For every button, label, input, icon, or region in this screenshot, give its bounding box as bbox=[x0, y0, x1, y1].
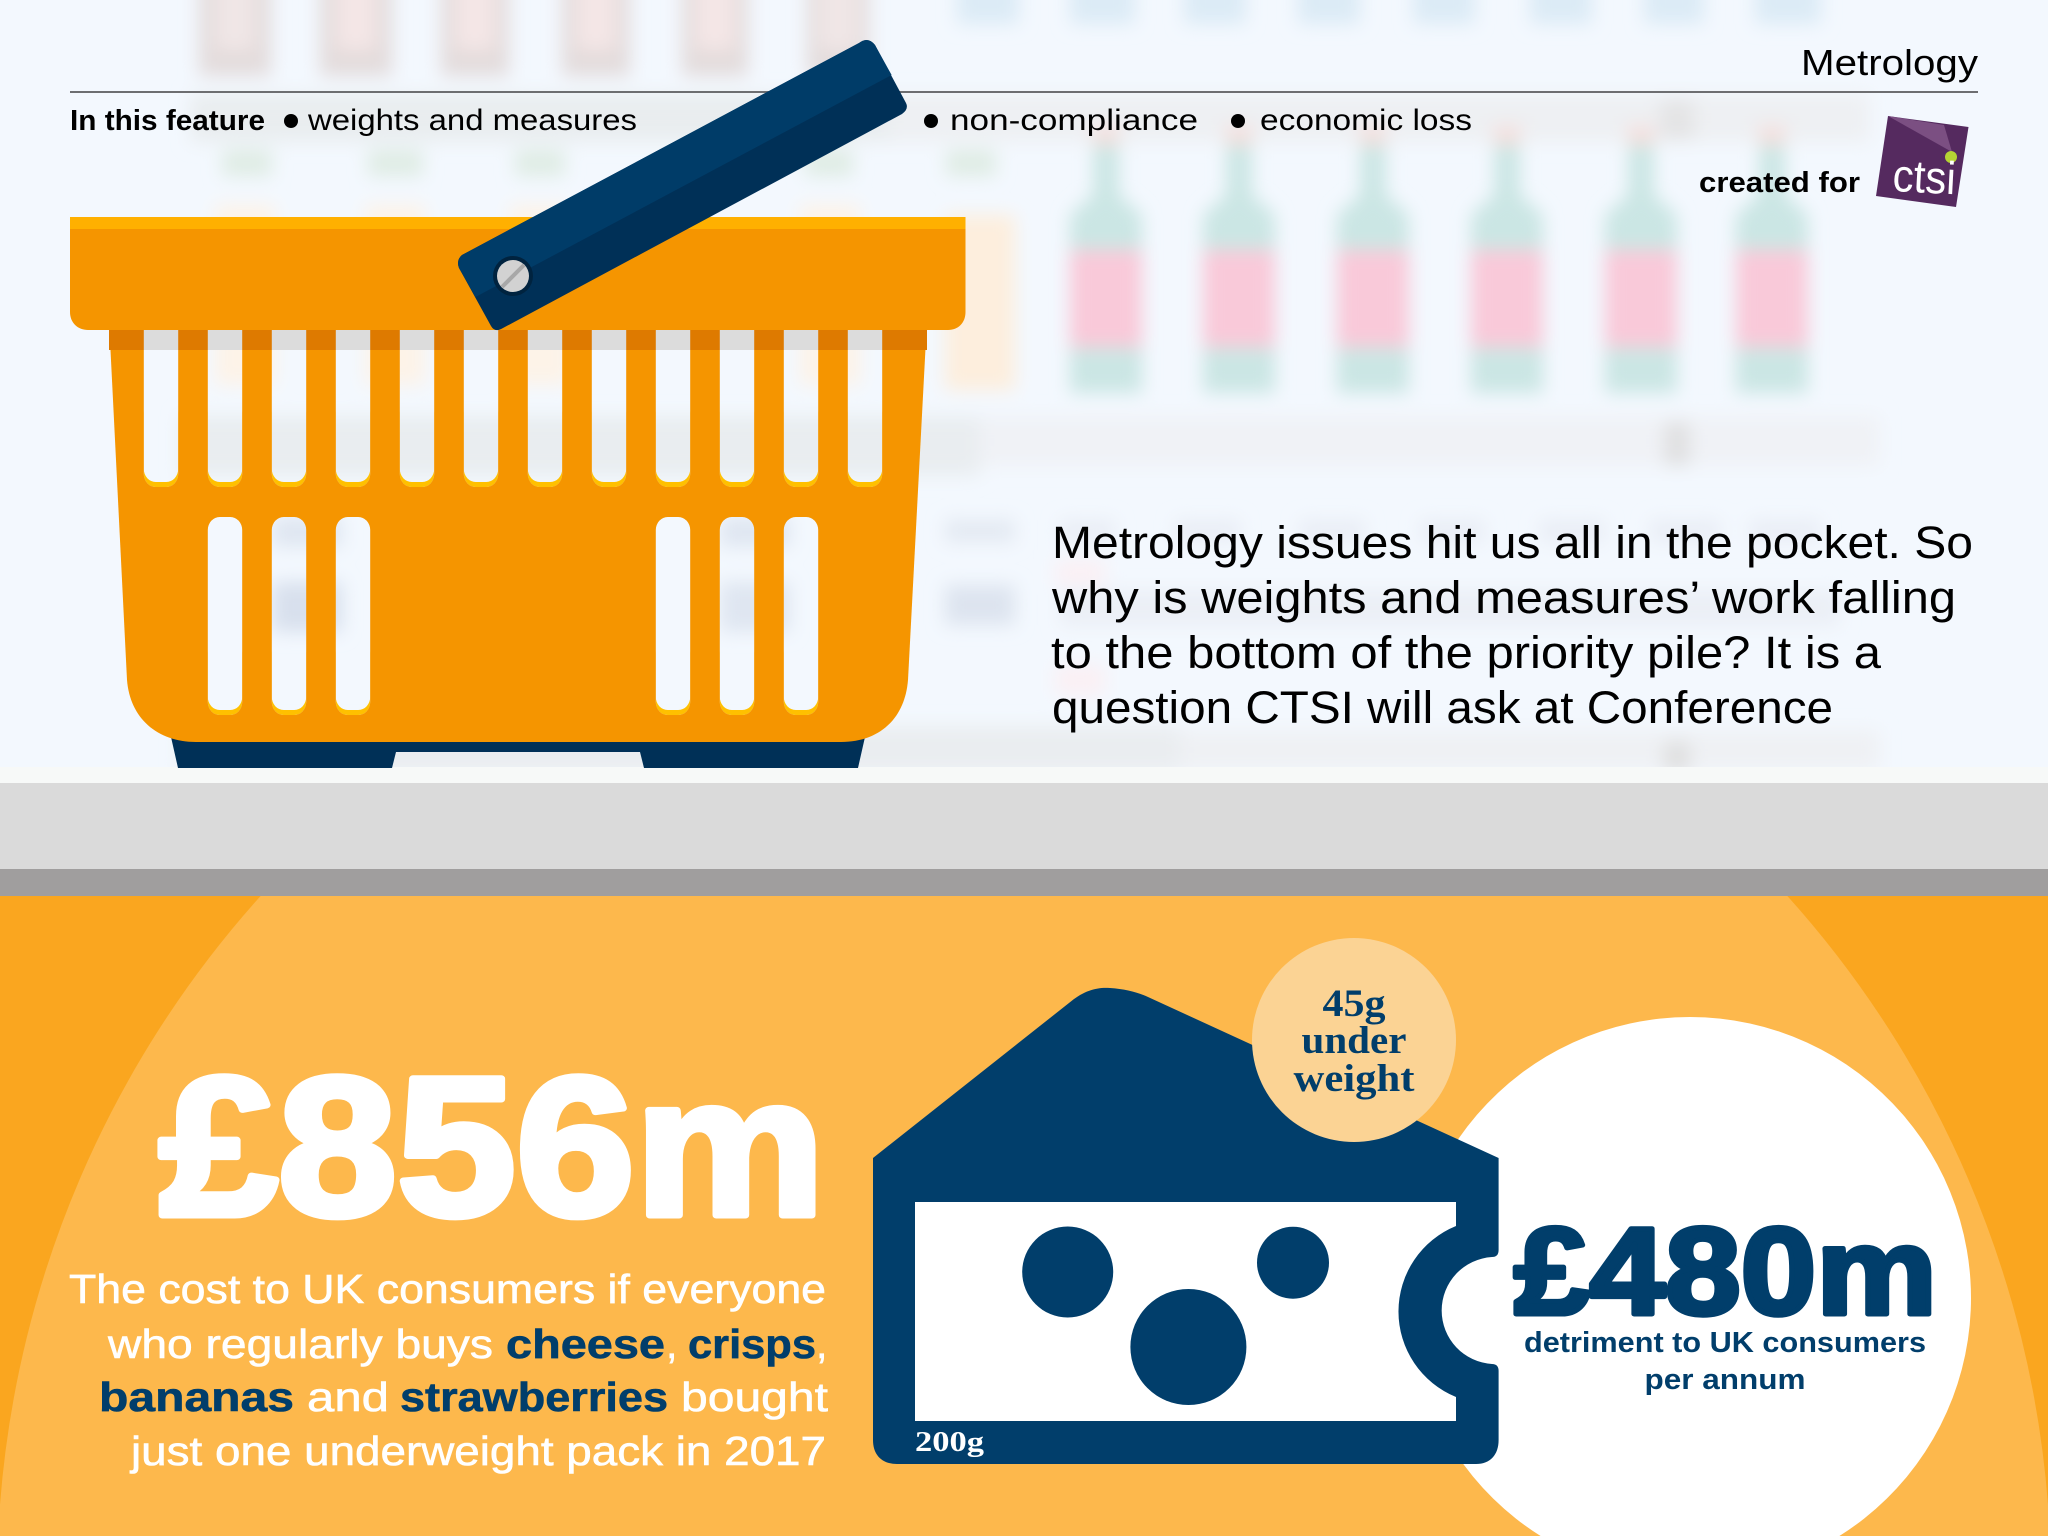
stat description: strawberries bbox=[400, 1374, 668, 1420]
cheese window bbox=[915, 1202, 1456, 1421]
stat description: bananas bbox=[99, 1374, 294, 1420]
bullet 2 bbox=[924, 114, 938, 128]
logo: ctsi: ctsi bbox=[1891, 149, 1957, 204]
stat description: , bbox=[666, 1321, 677, 1367]
white circle: £480m callout bbox=[1409, 1017, 1971, 1536]
stat caption: detriment to UK consumers bbox=[1524, 1327, 1926, 1359]
intro paragraph: why is weights and measures’ work falling bbox=[1051, 572, 1956, 623]
bullet 3 bbox=[1231, 114, 1245, 128]
callout: 45g under weight: weight bbox=[1294, 1057, 1414, 1100]
weight label: 200g bbox=[915, 1426, 985, 1458]
basket handle bbox=[458, 40, 907, 330]
intro paragraph: to the bottom of the priority pile? It is a bbox=[1051, 627, 1882, 678]
callout: 45g under weight: under bbox=[1302, 1019, 1406, 1062]
yellow slot lips bbox=[144, 400, 882, 715]
basket rim bbox=[70, 217, 966, 330]
basket feet bbox=[171, 737, 865, 768]
big stat: £856m: £856m bbox=[159, 1036, 825, 1257]
logo: ctsi bbox=[1876, 116, 1968, 207]
intro paragraph: question CTSI will ask at Conference bbox=[1052, 682, 1833, 733]
header rule and topic list bbox=[70, 42, 1978, 137]
callout: 45g under weight bbox=[1252, 938, 1456, 1142]
stat description: , bbox=[816, 1321, 827, 1367]
topic 3: economic loss bbox=[1260, 104, 1472, 137]
created for text: created for bbox=[1699, 167, 1860, 199]
stat description: The cost to UK consumers if everyone bbox=[69, 1266, 826, 1312]
bullet 1 bbox=[284, 114, 298, 128]
feature label: In this feature bbox=[70, 105, 265, 137]
stat description: just one underweight pack in 2017 bbox=[130, 1428, 826, 1474]
shelf edge bbox=[0, 767, 2048, 896]
topic 1: weights and measures bbox=[307, 104, 637, 137]
callout: 45g under weight: 45g bbox=[1322, 982, 1386, 1025]
topic 2: non-compliance bbox=[950, 104, 1198, 137]
cheese hole 3 bbox=[1130, 1289, 1246, 1405]
section label: Metrology bbox=[1801, 42, 1978, 83]
illustration: shopping basket bbox=[70, 40, 966, 768]
stat caption bbox=[1524, 1327, 1926, 1396]
stat description: cheese bbox=[506, 1321, 665, 1367]
stat caption: per annum bbox=[1644, 1364, 1806, 1396]
stat description: crisps bbox=[688, 1321, 816, 1367]
cheese hole 2 bbox=[1257, 1227, 1329, 1299]
stat description bbox=[69, 1266, 829, 1474]
intro paragraph: Metrology issues hit us all in the pocket. So bbox=[1052, 517, 1973, 568]
stat description: bought bbox=[681, 1374, 829, 1420]
cheese hole 1 bbox=[1022, 1226, 1113, 1318]
illustration: cheese wedge bbox=[873, 988, 1499, 1464]
shadow behind slot tops bbox=[140, 330, 885, 350]
handle screw bbox=[493, 256, 533, 296]
stat description: and bbox=[307, 1374, 389, 1420]
intro paragraph bbox=[1051, 517, 1973, 733]
basket body bbox=[109, 320, 927, 742]
stat description: who regularly buys bbox=[107, 1321, 493, 1367]
background: blurred supermarket shelves bbox=[0, 0, 2048, 772]
stat: £480m: £480m bbox=[1514, 1203, 1937, 1341]
panel: orange lower background bbox=[0, 896, 2048, 1536]
